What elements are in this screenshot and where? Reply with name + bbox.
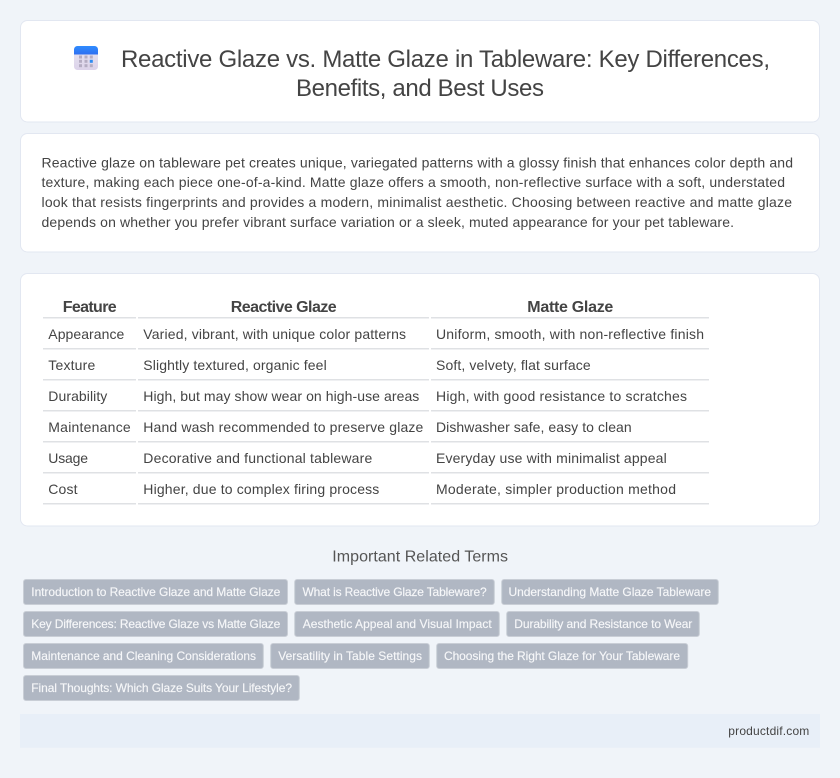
tag: versatility: Versatility in Table Settings (278, 649, 422, 663)
icon: calendar (74, 46, 98, 70)
text block: introduction: look that resists fingerprints and provides a modern, minimalist aesthetic. Choosing between reactive and matte glaze (42, 194, 792, 210)
title (121, 46, 770, 102)
tag: aesthetic appeal: Aesthetic Appeal and Visual Impact (303, 617, 492, 631)
table row: Cost (43, 481, 709, 504)
tag: key differences (24, 612, 288, 636)
tag: durability (507, 612, 699, 636)
table row: Texture: Texture (48, 357, 96, 373)
tag: what is reactive glaze (295, 580, 494, 604)
text block: introduction (42, 154, 793, 230)
table row: Usage: Decorative and functional tableware (143, 450, 373, 466)
table row: Maintenance: Maintenance (48, 419, 131, 435)
footer (20, 714, 820, 748)
table row: Appearance: Varied, vibrant, with unique color patterns (143, 326, 406, 342)
table row: Texture: Soft, velvety, flat surface (436, 357, 591, 373)
footer source text: productdif.com (728, 724, 809, 738)
table row: Durability: Durability (48, 388, 107, 404)
tag: introduction (24, 580, 288, 604)
table row: Appearance (43, 326, 709, 350)
table row: Maintenance: Dishwasher safe, easy to clean (436, 419, 632, 435)
table row: Appearance: Uniform, smooth, with non-reflective finish (436, 326, 704, 342)
panel: title header (20, 20, 820, 122)
tag: understanding matte glaze: Understanding Matte Glaze Tableware (508, 585, 711, 599)
table row: Usage: Usage (48, 450, 88, 466)
table row: Texture (43, 357, 709, 380)
related term tags (24, 580, 718, 700)
tag: choosing the right glaze: Choosing the Right Glaze for Your Tableware (444, 649, 680, 663)
table header: Reactive Glaze (231, 299, 337, 316)
table row: Durability (43, 388, 709, 412)
table header (43, 299, 709, 318)
table row: Cost: Higher, due to complex firing process (143, 481, 379, 497)
tag: maintenance (24, 644, 263, 668)
panel: comparison table (20, 274, 820, 526)
tag: key differences: Key Differences: Reactive Glaze vs Matte Glaze (31, 617, 281, 631)
table row: Texture: Slightly textured, organic feel (143, 357, 327, 373)
table header: Feature (63, 299, 117, 316)
table row: Appearance: Appearance (48, 326, 125, 342)
table row: Cost: Cost (48, 481, 78, 497)
table row: Cost: Moderate, simpler production method (436, 481, 676, 497)
heading: related terms: Important Related Terms (332, 549, 508, 566)
tag: introduction: Introduction to Reactive Glaze and Matte Glaze (31, 585, 281, 599)
table header: Matte Glaze (527, 299, 613, 316)
table row: Maintenance: Hand wash recommended to preserve glaze (143, 419, 424, 435)
table row: Maintenance (43, 419, 709, 442)
table row: Durability: High, with good resistance to scratches (436, 388, 687, 404)
table row: Durability: High, but may show wear on high-use areas (143, 388, 419, 404)
title: Reactive Glaze vs. Matte Glaze in Tableware: Key Differences, (121, 46, 770, 73)
text block: introduction: Reactive glaze on tableware pet creates unique, variegated patterns with a glossy finish that enhances color depth and (42, 154, 793, 170)
tag: final thoughts: Final Thoughts: Which Glaze Suits Your Lifestyle? (31, 681, 292, 695)
tag: final thoughts (24, 676, 299, 700)
tag: maintenance: Maintenance and Cleaning Considerations (31, 649, 256, 663)
table row: Usage: Everyday use with minimalist appeal (436, 450, 667, 466)
tag: understanding matte glaze (502, 580, 718, 604)
table row: Usage (43, 450, 709, 474)
tag: aesthetic appeal (295, 612, 499, 636)
tag: durability: Durability and Resistance to Wear (514, 617, 692, 631)
text block: introduction: texture, making each piece one-of-a-kind. Matte glaze offers a smooth, non-reflective surface with a soft, understated (42, 174, 785, 190)
title: Benefits, and Best Uses (296, 75, 544, 102)
tag: versatility (271, 644, 429, 668)
tag: what is reactive glaze: What is Reactive Glaze Tableware? (302, 585, 487, 599)
tag: choosing the right glaze (437, 644, 688, 668)
panel: introduction text (20, 134, 820, 252)
text block: introduction: depends on whether you prefer vibrant surface variation or a sleek, muted appearance for your pet tableware. (42, 214, 734, 230)
